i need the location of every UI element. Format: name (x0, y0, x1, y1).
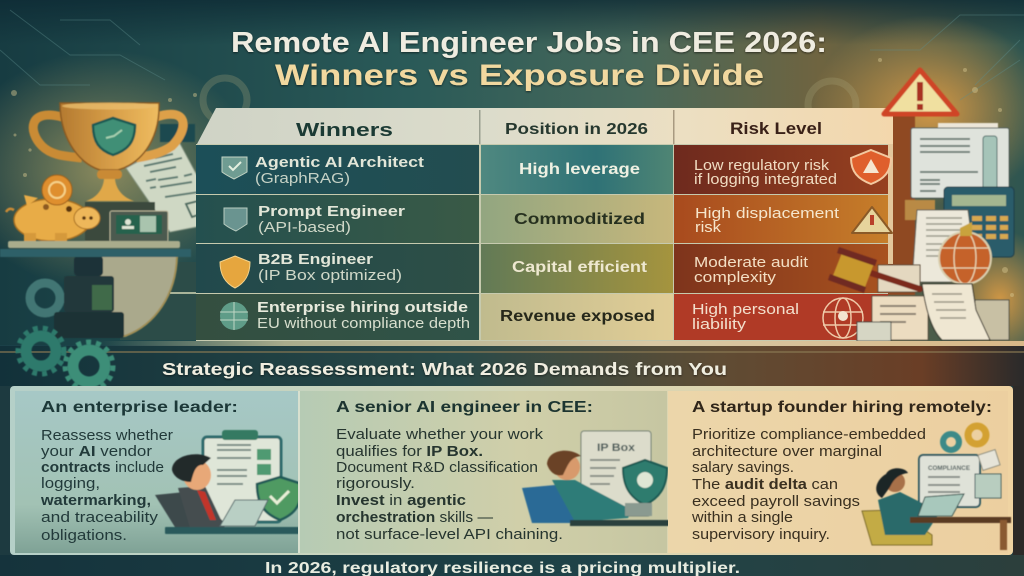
row: B2B Engineer (196, 244, 888, 293)
body text: not surface-level API chaining. (336, 526, 563, 543)
icon: gavel (828, 247, 920, 293)
panel: senior engineer (300, 391, 675, 553)
icon: faded gear (30, 283, 60, 313)
row: B2B Engineer: (IP Box optimized) (258, 268, 402, 284)
small doc (878, 265, 920, 292)
table header: Winners (296, 120, 393, 140)
section heading: Strategic Reassessment: What 2026 Demands from You (162, 359, 727, 379)
panel: startup founder: A startup founder hiring remotely: (692, 399, 992, 416)
panel: enterprise leader: An enterprise leader: (41, 399, 238, 416)
title: Remote AI Engineer Jobs in CEE 2026: (231, 27, 827, 59)
icon: piggy bank (6, 175, 100, 241)
dark tab behind document (160, 124, 195, 142)
body text: Reassess whether (41, 427, 173, 444)
body text: contracts include (41, 459, 164, 476)
icon: trophy shield (93, 118, 135, 155)
row: Agentic AI Architect: Agentic AI Architect (255, 154, 424, 171)
icon: warning triangle (852, 207, 892, 233)
title (231, 27, 827, 92)
documents (911, 123, 1009, 198)
warning triangle (884, 70, 957, 114)
pedestal column (54, 256, 124, 338)
receipt (912, 210, 972, 282)
body text: The audit delta can (692, 476, 838, 493)
document (126, 140, 222, 232)
panel: audience guidance (0, 386, 1024, 555)
body text: supervisory inquiry. (692, 526, 830, 543)
row: Enterprise hiring outside EU: Revenue exposed (500, 308, 655, 325)
row: Enterprise hiring outside EU: EU without compliance depth (257, 316, 470, 332)
icon: warning shield (851, 150, 891, 184)
row: Agentic AI Architect: (GraphRAG) (255, 171, 350, 187)
icon: globe (220, 302, 248, 330)
row: Prompt Engineer: Commoditized (514, 211, 645, 228)
panel: enterprise leader (15, 391, 305, 553)
row: Prompt Engineer: risk (695, 219, 722, 236)
row: Enterprise hiring outside EU: liability (692, 316, 747, 333)
illustration: trophy and savings (0, 102, 222, 338)
row: Prompt Engineer: (API-based) (258, 220, 351, 236)
body text: logging, (41, 475, 100, 492)
illustration: founder at desk: COMPLIANCE (928, 466, 970, 472)
body text: Prioritize compliance-embedded (692, 426, 926, 443)
row: Prompt Engineer: High displacement (695, 205, 840, 222)
footer (0, 555, 1024, 576)
body text: obligations. (41, 527, 127, 544)
row: Enterprise hiring outside EU: High personal (692, 301, 799, 318)
body text: qualifies for IP Box. (336, 443, 483, 460)
body text (691, 426, 926, 543)
row: Agentic AI Architect: High leverage (519, 161, 640, 178)
shelf (0, 241, 191, 257)
illustration: leader with clipboard (155, 430, 305, 534)
body text: within a single (691, 509, 793, 526)
body text (336, 426, 563, 543)
row: Enterprise hiring outside EU: Enterprise hiring outside (257, 299, 468, 316)
folder (905, 200, 935, 220)
illustration: engineer with IP Box: IP Box (597, 442, 636, 454)
icon: shield (224, 208, 247, 231)
table header: Position in 2026 (505, 121, 648, 138)
warning panel wash (885, 115, 915, 295)
paper stack (857, 284, 1009, 341)
body text: orchestration skills — (336, 509, 493, 526)
row: Agentic AI Architect: if logging integrated (694, 172, 837, 188)
body text (40, 427, 173, 544)
body text: architecture over marginal (692, 443, 882, 460)
row: Enterprise hiring outside EU (196, 294, 888, 340)
table grid backing (196, 144, 888, 341)
backing circle (100, 256, 177, 336)
body text: Evaluate whether your work (336, 426, 544, 443)
panel dividers (298, 391, 300, 553)
row: B2B Engineer: Capital efficient (512, 259, 647, 276)
icon: shield check (222, 157, 247, 179)
illustration: risk documents (885, 115, 1014, 295)
panel: startup founder (668, 391, 1011, 553)
bands under table (0, 341, 1024, 386)
body text: Document R&D classification (336, 459, 538, 476)
table header: Risk Level (730, 120, 822, 138)
body text: exceed payroll savings (692, 493, 860, 510)
row: B2B Engineer: B2B Engineer (258, 251, 373, 268)
body text: rigorously. (336, 475, 415, 492)
panel: senior engineer: A senior AI engineer in CEE: (336, 399, 593, 416)
table header (197, 108, 893, 144)
icon: globe (939, 222, 991, 284)
icon: gold shield (220, 256, 250, 288)
row: Agentic AI Architect: Low regulatory risk (694, 158, 830, 174)
icon: pin globe (823, 298, 863, 338)
body text: and traceability (41, 509, 159, 526)
body text: your AI vendor (41, 443, 152, 460)
body text: Invest in agentic (336, 492, 466, 509)
body text: watermarking, (40, 492, 151, 509)
body text: salary savings. (692, 459, 794, 476)
illustration: papers over table (828, 70, 1009, 341)
screen (110, 211, 168, 242)
right table edge (888, 144, 893, 264)
row: Prompt Engineer: Prompt Engineer (258, 203, 405, 220)
plinth (85, 202, 155, 242)
icon: calculator (944, 187, 1014, 257)
row: Prompt Engineer (196, 195, 892, 243)
illustration: engineer with IP Box (522, 431, 675, 526)
table (196, 108, 893, 341)
illustration: founder at desk (862, 426, 1011, 550)
row: Agentic AI Architect (196, 145, 891, 194)
trophy (33, 102, 183, 201)
icon: gears (18, 328, 113, 390)
row: B2B Engineer: complexity (694, 270, 777, 286)
title: Winners vs Exposure Divide (275, 59, 764, 92)
row: B2B Engineer: Moderate audit (694, 255, 808, 271)
